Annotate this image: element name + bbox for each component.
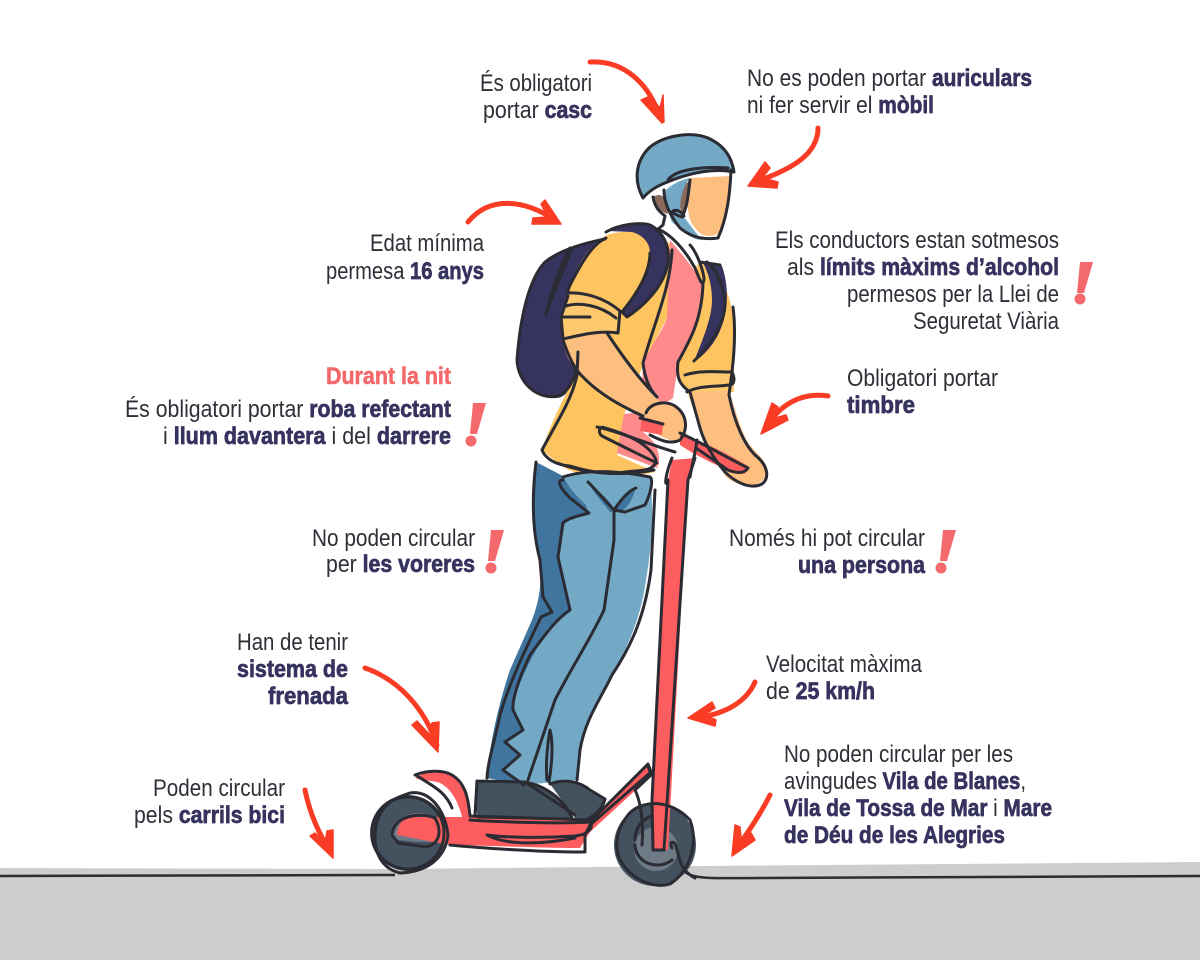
callout: voreres: No poden circular	[312, 525, 475, 552]
icon: exclamation alcohol	[1074, 262, 1093, 304]
callout: casc: portar casc	[483, 97, 592, 124]
arrow: to scooter stem	[688, 682, 755, 726]
callout: frenada: sistema de	[237, 656, 348, 683]
arrow: to back	[468, 200, 561, 224]
callout: durant la nit: És obligatori portar roba refectant	[125, 396, 451, 423]
callout: voreres	[312, 525, 475, 578]
callout: durant la nit	[125, 363, 451, 450]
callout: avingudes	[784, 741, 1052, 849]
callout: alcohol: Els conductors estan sotmesos	[775, 227, 1059, 254]
backpack straps	[607, 224, 727, 362]
callout: edat	[326, 230, 485, 285]
callout: avingudes: avingudes Vila de Blanes,	[784, 768, 1026, 795]
arrow: to handlebar	[761, 395, 828, 434]
scooter wheels	[370, 795, 696, 886]
callout: una persona: una persona	[798, 552, 926, 579]
callout: velocitat	[766, 651, 923, 705]
callout: carrils bici	[134, 775, 285, 829]
arms	[563, 333, 767, 486]
callout: frenada: Han de tenir	[237, 629, 348, 656]
callout: velocitat: Velocitat màxima	[766, 651, 923, 678]
arrow: to brake	[365, 668, 439, 752]
callout: timbre	[847, 365, 998, 419]
callout: timbre: Obligatori portar	[847, 365, 998, 392]
shirt	[542, 232, 734, 477]
callout: casc	[480, 70, 592, 124]
callout: alcohol: als límits màxims d’alcohol	[787, 254, 1059, 281]
callout: timbre: timbre	[847, 392, 915, 419]
callout: alcohol	[775, 227, 1060, 335]
callout: avingudes: No poden circular per les	[784, 741, 1013, 768]
callout: una persona: Només hi pot circular	[729, 525, 925, 552]
callout: avingudes: Vila de Tossa de Mar i Mare	[784, 795, 1052, 822]
callout: auriculars: No es poden portar auriculars	[747, 65, 1032, 92]
callout: auriculars: ni fer servir el mòbil	[747, 92, 934, 119]
scooter deck and fender	[397, 764, 651, 848]
illustration: rider on electric scooter	[370, 135, 767, 886]
backpack	[517, 240, 605, 398]
icon: exclamation night	[466, 403, 486, 446]
callout: durant la nit: i llum davantera i del darrere	[163, 423, 451, 450]
callout: edat: Edat mínima	[370, 230, 485, 257]
callout: una persona	[729, 525, 926, 579]
face and neck	[653, 176, 730, 236]
callout: auriculars	[747, 65, 1032, 119]
arrow: to helmet	[590, 62, 664, 123]
icon: exclamation persona	[936, 530, 956, 574]
callout: alcohol: Seguretat Viària	[913, 308, 1060, 335]
callout: frenada	[237, 629, 349, 710]
callout: edat: permesa 16 anys	[326, 258, 484, 285]
callout: velocitat: de 25 km/h	[766, 678, 875, 705]
helmet	[637, 135, 733, 240]
arrow: to bike lane	[305, 790, 333, 858]
callout: casc: És obligatori	[480, 70, 592, 97]
callout: carrils bici: pels carrils bici	[134, 802, 285, 829]
ground	[0, 862, 1200, 960]
line art	[372, 135, 767, 885]
callout: voreres: per les voreres	[326, 551, 475, 578]
scooter stem and handlebar	[640, 416, 748, 850]
callout: avingudes: de Déu de les Alegries	[784, 822, 1005, 849]
jeans	[487, 462, 652, 785]
arrow: to head	[748, 128, 818, 188]
callout: frenada: frenada	[268, 683, 349, 710]
shoes	[475, 781, 605, 819]
callout: carrils bici: Poden circular	[153, 775, 285, 802]
callout: durant la nit: Durant la nit	[326, 363, 451, 390]
pink top	[617, 240, 704, 468]
icon: exclamation voreres	[486, 530, 504, 574]
callout: alcohol: permesos per la Llei de	[847, 281, 1059, 308]
arrow: to road	[732, 795, 770, 856]
